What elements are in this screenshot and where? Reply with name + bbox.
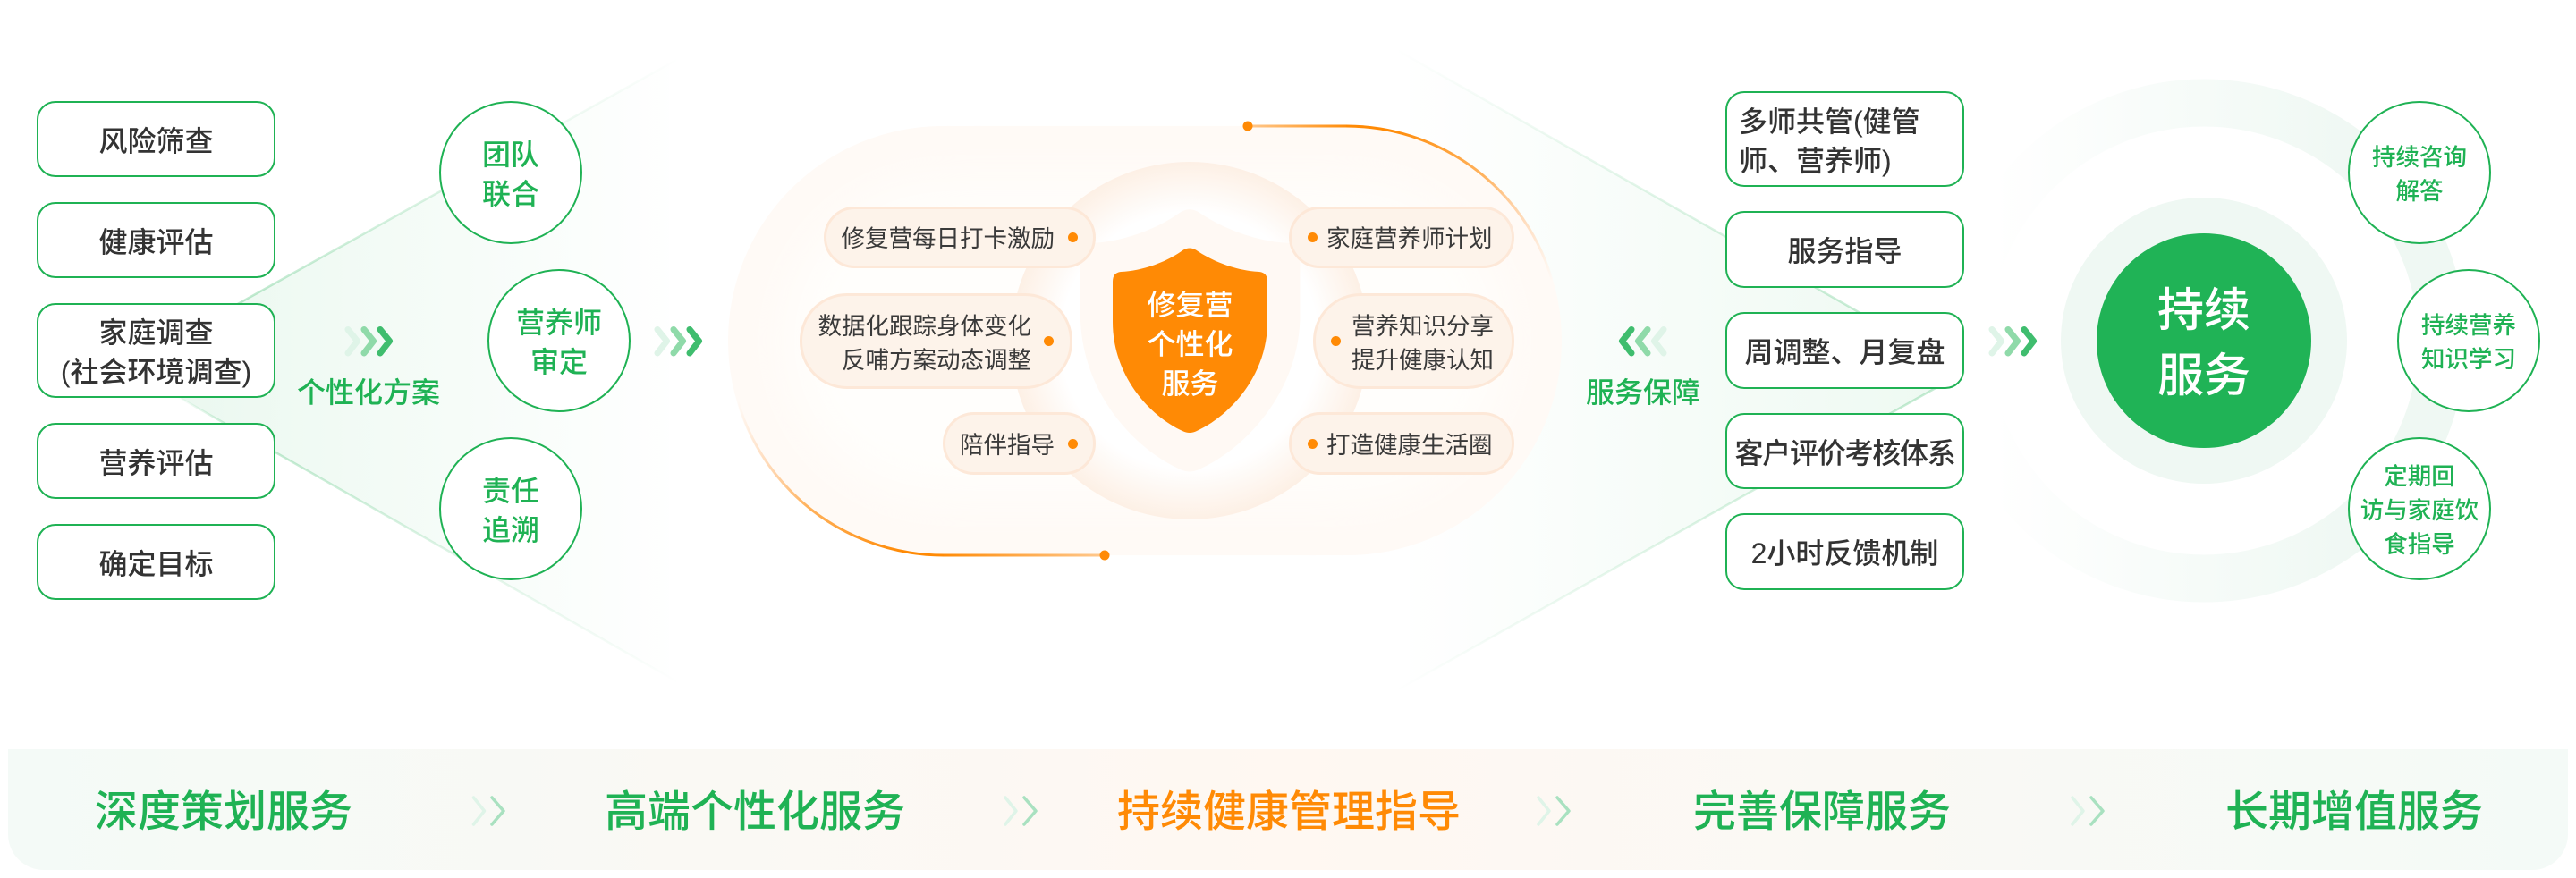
bar: planning: 深度策划服务 <box>95 789 352 836</box>
bar: guarantee: 完善保障服务 <box>1693 789 1951 836</box>
box: weekly review <box>1725 312 1964 389</box>
pill: nutrition knowledge: 提升健康认知 <box>1352 347 1494 374</box>
box: service guidance: 服务指导 <box>1787 235 1902 267</box>
circle: ongoing learning: 持续营养 <box>2421 312 2516 339</box>
box: service guidance <box>1725 211 1964 288</box>
shield text <box>1147 289 1233 400</box>
pill: accompanying guidance <box>943 412 1096 475</box>
circle: team: 团队 <box>482 139 539 171</box>
bottom bar background <box>8 749 2568 870</box>
pill: health circle: 打造健康生活圈 <box>1326 432 1492 459</box>
pill: daily check-in: 修复营每日打卡激励 <box>841 225 1055 252</box>
box: family survey: 家庭调查 <box>98 317 213 349</box>
box: set goals: 确定目标 <box>98 547 213 579</box>
box: nutrition assessment: 营养评估 <box>98 447 213 479</box>
bar chevrons 3 <box>1538 798 1569 824</box>
core text: 服务 <box>2157 350 2250 402</box>
box: multi-expert <box>1725 91 1964 187</box>
circle: ongoing consultation: 解答 <box>2395 178 2444 205</box>
circle: team: 联合 <box>482 178 539 210</box>
large pale shield <box>1080 209 1301 471</box>
circle: dietitian review: 营养师 <box>516 307 602 339</box>
bar chevrons 2 <box>1005 798 1036 824</box>
box: customer review: 客户评价考核体系 <box>1734 436 1955 469</box>
box: multi-expert: 多师共管(健管 <box>1739 106 1920 138</box>
box: health assessment <box>37 202 275 278</box>
right funnel <box>1395 49 1964 691</box>
circle: follow-up: 访与家庭饮 <box>2360 497 2479 524</box>
circle: team <box>439 101 582 244</box>
box: weekly review: 周调整、月复盘 <box>1744 336 1945 368</box>
box: risk screening <box>37 101 275 177</box>
bar chevrons 4 <box>2072 798 2103 824</box>
pill: family dietitian plan: 家庭营养师计划 <box>1326 225 1492 252</box>
label: personalised plan: 个性化方案 <box>297 376 440 409</box>
box: customer review <box>1725 413 1964 489</box>
core text <box>2157 285 2250 402</box>
pill: data tracking: 反哺方案动态调整 <box>842 347 1031 374</box>
center stadium backdrop <box>728 126 1562 555</box>
circle: dietitian review: 审定 <box>530 346 588 378</box>
left funnel <box>125 58 680 683</box>
circle: ongoing learning <box>2397 269 2540 412</box>
service halo <box>2061 198 2347 484</box>
circle: follow-up: 定期回 <box>2384 463 2455 490</box>
circle: accountability <box>439 437 582 580</box>
pill: data tracking <box>800 293 1072 389</box>
pill: health circle <box>1289 412 1514 475</box>
shield text: 个性化 <box>1147 328 1233 360</box>
shield text: 修复营 <box>1147 289 1233 321</box>
box: health assessment: 健康评估 <box>98 225 213 257</box>
pill: data tracking: 数据化跟踪身体变化 <box>818 313 1031 340</box>
circle: ongoing consultation <box>2348 101 2491 244</box>
shield text: 服务 <box>1161 367 1218 400</box>
box: 2-hour feedback <box>1725 513 1964 590</box>
pill: daily check-in <box>824 207 1096 268</box>
bar: personalised: 高端个性化服务 <box>605 789 905 836</box>
chevrons: to ongoing service <box>1992 329 2034 353</box>
orange arc bottom <box>729 341 1109 560</box>
core text: 持续 <box>2157 285 2250 337</box>
box: set goals <box>37 524 275 600</box>
orange shield <box>1113 249 1267 433</box>
chevrons: to center <box>657 329 699 353</box>
box: risk screening: 风险筛查 <box>98 125 213 157</box>
outer service ring <box>1966 103 2442 578</box>
bar chevrons 1 <box>474 798 504 824</box>
center halo ring <box>1011 162 1368 519</box>
pill: family dietitian plan <box>1289 207 1514 268</box>
box: family survey: (社会环境调查) <box>61 356 251 388</box>
circle: ongoing learning: 知识学习 <box>2421 346 2516 373</box>
circle: ongoing consultation: 持续咨询 <box>2372 144 2467 171</box>
circle: accountability: 追溯 <box>482 514 539 546</box>
circle: accountability: 责任 <box>482 475 539 507</box>
bar: long-term: 长期增值服务 <box>2225 789 2483 836</box>
pill: nutrition knowledge <box>1313 293 1514 389</box>
pill: nutrition knowledge: 营养知识分享 <box>1352 313 1494 340</box>
circle: follow-up: 食指导 <box>2384 531 2455 558</box>
box: nutrition assessment <box>37 423 275 499</box>
circle: follow-up <box>2348 437 2491 580</box>
orange arc top <box>1243 122 1561 341</box>
box: family survey <box>37 303 275 398</box>
bar: ongoing management: 持续健康管理指导 <box>1117 789 1461 836</box>
chevrons: personalised plan <box>348 329 390 353</box>
circle: dietitian review <box>487 269 631 412</box>
label: service guarantee: 服务保障 <box>1586 376 1700 409</box>
service core <box>2097 233 2311 448</box>
pill: accompanying guidance: 陪伴指导 <box>960 432 1055 459</box>
box: 2-hour feedback: 2小时反馈机制 <box>1751 537 1938 570</box>
box: multi-expert: 师、营养师) <box>1739 145 1892 177</box>
chevrons: service guarantee <box>1623 329 1664 353</box>
stadium inner glow <box>787 185 1503 496</box>
